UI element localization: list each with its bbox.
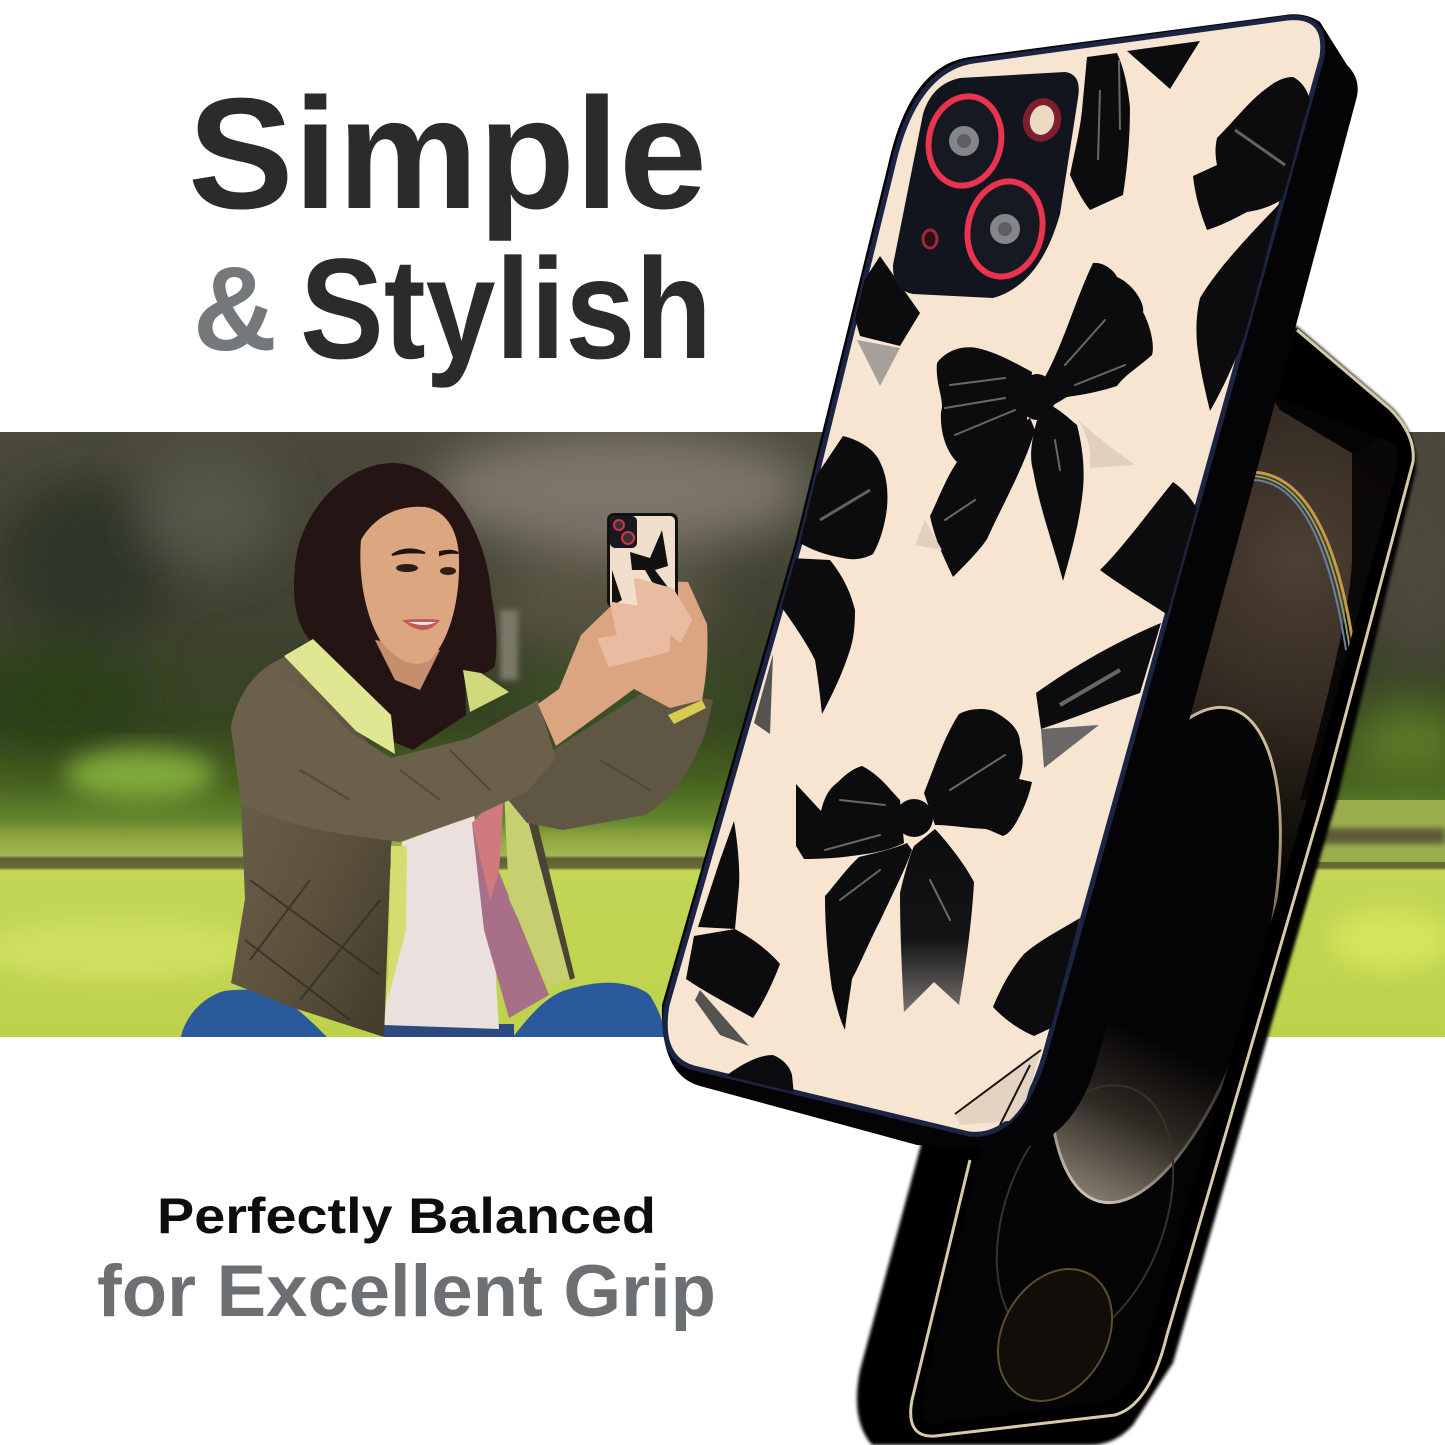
title: [188, 66, 712, 389]
photo band: park background: [0, 430, 1445, 1037]
lens: top left: [920, 89, 1010, 193]
foreground grass highlights: [0, 920, 260, 980]
hair: [294, 463, 496, 750]
phone black body: [857, 325, 1416, 1445]
plaid shirt: [472, 790, 549, 1018]
face: [360, 507, 459, 664]
right bezel shade: [1300, 438, 1398, 800]
flash: [1018, 94, 1066, 146]
caption line 1: Perfectly Balanced: [157, 1188, 656, 1244]
phone case: [662, 14, 1358, 1150]
bow: lower left: [686, 821, 780, 1046]
bow: middle left: [754, 436, 887, 734]
small phone: [607, 513, 678, 608]
rainbow arc: [1250, 472, 1354, 650]
bow: top centre fragment: [1070, 41, 1200, 210]
right lining: [504, 790, 570, 987]
far sleeve: [500, 689, 713, 830]
phone screen wallpaper: [996, 398, 1398, 1402]
woman taking selfie: [181, 463, 713, 1037]
hood collar: [284, 639, 395, 754]
facial features: [392, 549, 458, 630]
right lawn strip: [1317, 800, 1445, 862]
bow: lower right: [993, 918, 1080, 1036]
bow: bottom: [727, 1055, 794, 1095]
bow: top right: [1193, 77, 1310, 411]
bow: right middle: [1036, 482, 1198, 768]
bow: large lower: [796, 709, 1032, 1030]
zip lining: [388, 846, 407, 1000]
headline: Simple: Simple: [188, 66, 707, 242]
bow: large upper: [915, 263, 1153, 581]
jeans: [181, 983, 665, 1037]
microphone ring: [923, 230, 937, 248]
cream case back with navy rim: [665, 18, 1323, 1134]
wallpaper lower ellipses: [996, 1084, 1174, 1318]
headline: Stylish: Stylish: [300, 230, 712, 389]
caption line 2: for Excellent Grip: [97, 1251, 716, 1332]
gold frame edges: [911, 330, 1413, 1436]
lamp post: [500, 610, 518, 680]
sunlit bush: [65, 749, 215, 801]
jacket quilting: [245, 880, 380, 1020]
neck: [375, 640, 440, 690]
front sleeve: [231, 700, 556, 842]
camera module: [893, 72, 1079, 298]
fingers: [600, 580, 690, 665]
bow: beside camera: [850, 256, 920, 386]
caption: [97, 1188, 716, 1332]
bow: lower right wisps: [955, 1050, 1041, 1125]
ampersand: &: [193, 242, 277, 376]
hand and wrist: [538, 580, 707, 746]
watch bracelet: [668, 700, 706, 724]
jacket body: [231, 656, 399, 1037]
case black bumper: [662, 14, 1358, 1150]
notch: [1275, 398, 1378, 453]
white shirt: [384, 815, 499, 1029]
lens: bottom right: [959, 174, 1051, 284]
back phone with gold edge: [857, 325, 1420, 1445]
bow pattern: [686, 41, 1310, 1125]
wallpaper dome: [1053, 706, 1282, 1204]
